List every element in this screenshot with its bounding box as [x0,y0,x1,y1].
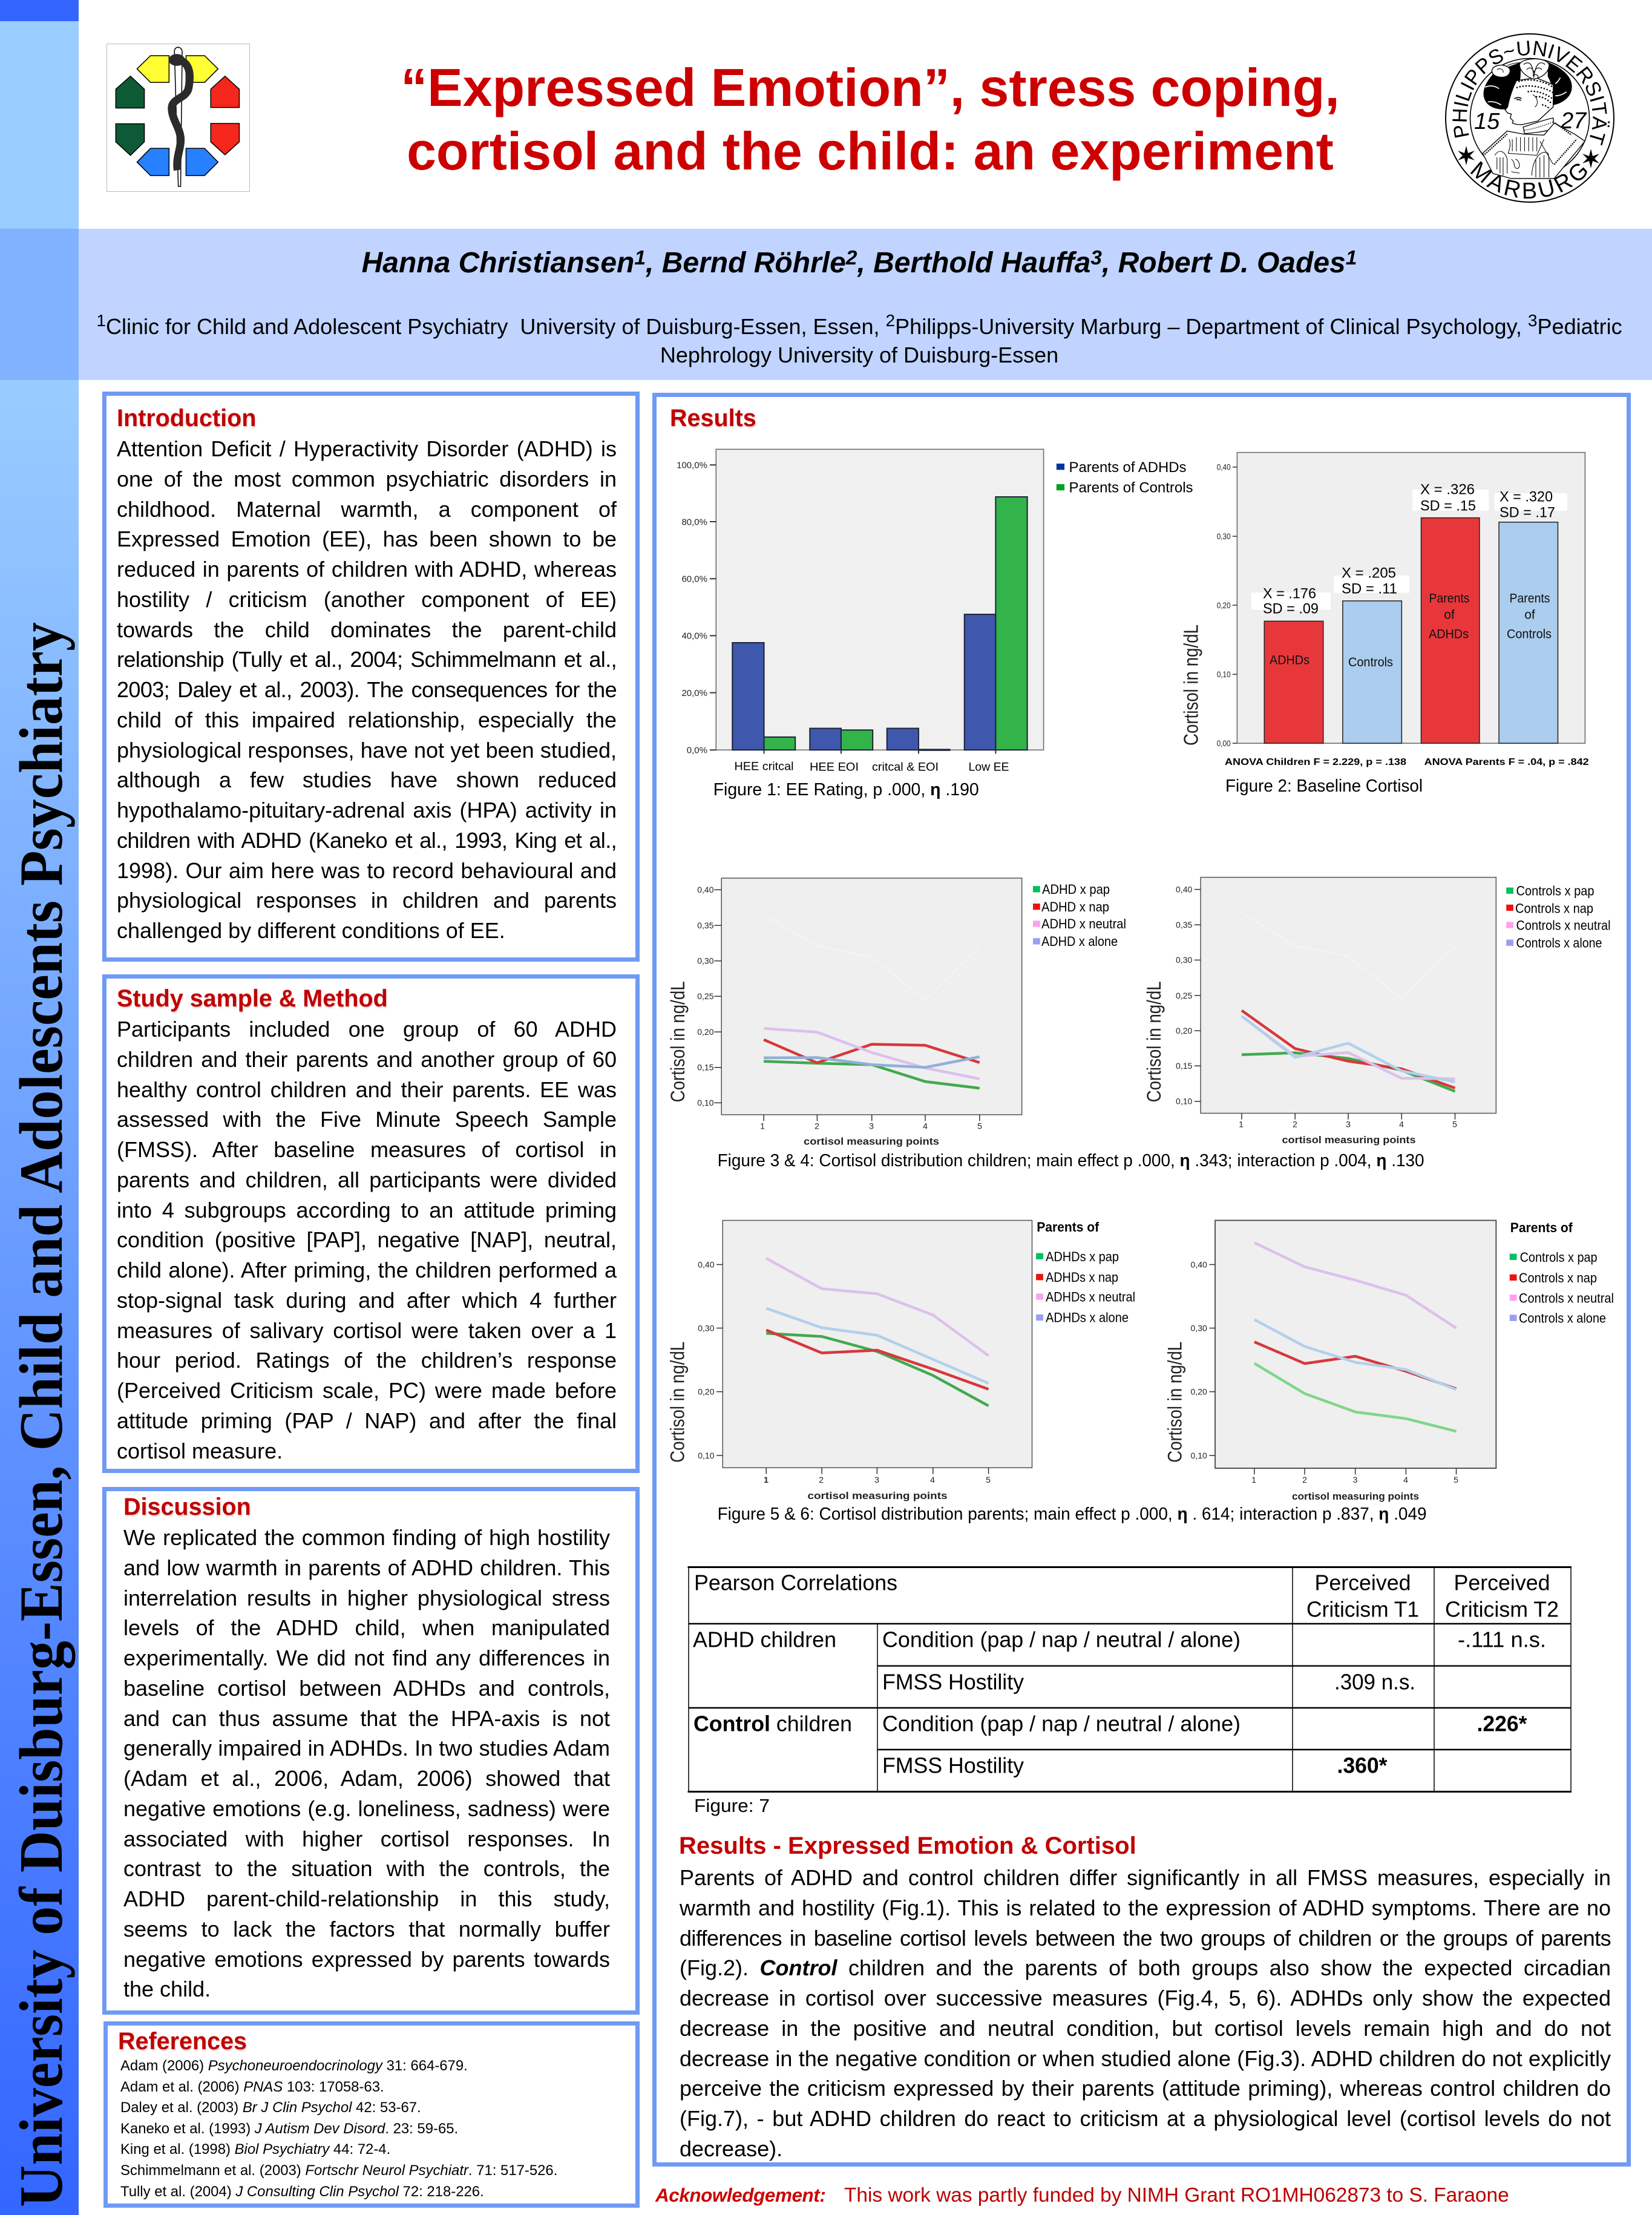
panel: discussion [102,1487,640,2015]
chart: figure 3 cortisol children ADHD line chart: cortisol measuring points [804,1136,939,1147]
text: introduction body: relationship (Tully et al., 2004; Schimmelmann et al., [117,647,617,672]
text: method body: children and their parents and another group of 60 [117,1047,617,1072]
chart: figure 1 EE rating bar chart: 40,0% [681,631,707,642]
authors band background with authors and affiliations [79,229,1652,380]
text: method body: attitude priming (PAP / NAP) and after the final [117,1408,617,1433]
logo: Philipps-Universität Marburg seal: 27 [1560,108,1587,134]
text: results summary: decrease). [680,2136,782,2161]
chart: figure 4 cortisol children controls line chart: 0,20 [1176,1026,1193,1035]
text: discussion body: ADHD parent-child-relationship in this study, [123,1886,610,1911]
chart: figure 2 baseline cortisol bar chart: Parents [1429,591,1469,605]
chart: figure 6 cortisol parents of controls line chart: 0,20 [1191,1387,1207,1397]
chart: figure 6 cortisol parents of controls line chart: 0,30 [1191,1323,1207,1333]
chart: figure 4 cortisol children controls line chart: Controls x nap [1515,901,1593,916]
text: introduction body: hypothalamo-pituitary-adrenal axis (HPA) activity in [117,798,617,822]
chart: figure 1 EE rating bar chart: HEE critcal [735,761,794,773]
chart: figure 5 cortisol parents of ADHDs line chart: 1 [764,1475,769,1485]
chart: figure 4 cortisol children controls line chart: 2 [1293,1119,1297,1129]
text: introduction body [117,434,617,946]
heading: introduction: Introduction [117,405,256,432]
chart: figure 2 baseline cortisol bar chart: Controls [1348,655,1393,669]
heading: discussion: Discussion [123,1494,251,1520]
text: introduction body: one of the most common psychiatric disorders in [117,467,617,491]
left strip: light block beside title [0,21,79,229]
chart: figure 4 cortisol children controls line chart: cortisol measuring points [1282,1134,1416,1146]
chart: figure 5 cortisol parents of ADHDs line chart [660,1210,1144,1503]
chart: figure 6 cortisol parents of controls line chart [1144,1210,1622,1503]
chart: figure 2 baseline cortisol bar chart: of [1444,608,1455,622]
chart: figure 2 baseline cortisol bar chart: Cortisol in ng/dL [1180,625,1202,746]
left strip with vertical institution title: University of Duisburg-Essen, Child and Adolescents Psychiatry [7,622,76,2207]
chart: figure 2 baseline cortisol bar chart: ADHDs [1429,627,1469,641]
table: Pearson correlations, figure 7: Criticism T2 [1445,1597,1559,1622]
text: results summary: decrease in the negative condition or when studied alone (Fig.3). ADHD children do not explicitly [680,2046,1611,2071]
chart: figure 1 EE rating bar chart: Parents of Controls [1069,480,1193,496]
text: discussion body: levels of the ADHD child, when manipulated [123,1615,610,1640]
chart: figure 3 cortisol children ADHD line chart: 0,15 [697,1063,714,1072]
chart: figure 5 cortisol parents of ADHDs line chart: 2 [819,1475,824,1485]
chart: figure 5 cortisol parents of ADHDs line chart: cortisol measuring points [807,1490,948,1501]
chart: figure 6 cortisol parents of controls line chart: 4 [1403,1475,1408,1485]
chart: figure 6 cortisol parents of controls line chart: cortisol measuring points [1292,1491,1419,1502]
chart: figure 1 EE rating bar chart: 80,0% [681,517,707,527]
chart: figure 5 cortisol parents of ADHDs line chart: 3 [874,1475,879,1485]
text: method body: assessed with the Five Minute Speech Sample [117,1107,617,1132]
text: reference list: Adam et al. (2006) PNAS 103: 17058-63. [120,2079,384,2095]
heading: study sample and method: Study sample & Method [117,985,388,1012]
caption: figures 3 and 4: Figure 3 & 4: Cortisol distribution children; main effect p .000, η .343; interaction p .004, η .130 [718,1151,1424,1170]
heading: results expressed emotion and cortisol: Results - Expressed Emotion & Cortisol [679,1833,1136,1859]
panel: study sample and method [102,974,640,1473]
text: method body: Participants included one group of 60 ADHD [117,1017,617,1042]
text: method body: (Perceived Criticism scale, PC) were made before [117,1378,617,1403]
chart: figure 5 cortisol parents of ADHDs line chart: 0,40 [698,1259,715,1269]
chart: figure 3 cortisol children ADHD line chart: 1 [760,1121,765,1131]
chart: figure 3 cortisol children ADHD line chart: 3 [869,1121,874,1131]
chart: figure 2 baseline cortisol bar chart: SD = .11 [1342,580,1397,597]
text: This work was partly funded by NIMH Grant RO1MH062873 to S. Faraone [844,2184,1509,2207]
chart: figure 2 baseline cortisol bar chart: 0,10 [1217,669,1231,679]
chart: figure 5 cortisol parents of ADHDs line chart: 0,20 [698,1387,715,1397]
chart: figure 2 baseline cortisol bar chart: 0,30 [1217,531,1231,541]
chart: figure 3 cortisol children ADHD line chart: 2 [815,1121,819,1131]
chart: figure 5 cortisol parents of ADHDs line chart: ADHDs x nap [1046,1270,1118,1285]
chart: figure 4 cortisol children controls line chart: 0,25 [1176,991,1193,1000]
affiliations [79,312,1640,369]
chart: figure 5 cortisol parents of ADHDs line chart: 0,30 [698,1323,715,1333]
chart: figure 1 EE rating bar chart: critcal & EOI [872,761,939,774]
text: discussion body: (Adam et al., 2006, Adam, 2006) showed that [123,1766,610,1791]
chart: figure 2 baseline cortisol bar chart: Controls [1507,627,1552,641]
text: reference list: Tully et al. (2004) J Consulting Clin Psychol 72: 218-226. [120,2184,484,2200]
text: introduction body: although a few studies have shown reduced [117,767,617,792]
chart: figure 5 cortisol parents of ADHDs line chart: Parents of [1037,1219,1100,1235]
chart: figure 5 cortisol parents of ADHDs line chart: 4 [930,1475,935,1485]
title [401,58,1340,181]
text: results summary: (Fig.2). Control children and the parents of both groups also show the expected circadian [680,1955,1611,1980]
text: discussion body: associated with higher cortisol responses. In [123,1826,610,1851]
text: method body: hour period. Ratings of the children’s response [117,1348,617,1373]
chart: figure 4 cortisol children controls line chart [1144,871,1622,1149]
chart: figure 1 EE rating bar chart: Low EE [968,761,1009,774]
table: Pearson correlations, figure 7: FMSS Hostility [882,1753,1024,1778]
table: Pearson correlations, figure 7: Condition (pap / nap / neutral / alone) [882,1711,1241,1736]
logo: Philipps-Universität Marburg seal: 15 [1474,109,1500,134]
chart: figure 1 EE rating bar chart: Parents of ADHDs [1069,459,1186,476]
left strip: block beside authors [0,229,79,380]
text: discussion body: experimentally. We did not find any differences in [123,1646,610,1670]
text: reference list [120,2056,557,2202]
panel: introduction [102,392,640,962]
chart: figure 3 cortisol children ADHD line chart: 4 [923,1121,928,1131]
chart: figure 4 cortisol children controls line chart: Controls x pap [1516,883,1594,898]
chart: figure 4 cortisol children controls line chart: 1 [1239,1119,1244,1129]
text: introduction body: children with ADHD (Kaneko et al., 1993, King et al., [117,828,617,853]
panel: references [103,2021,640,2208]
text: reference list: Adam (2006) Psychoneuroendocrinology 31: 664-679. [120,2058,468,2074]
chart: figure 3 cortisol children ADHD line chart: Cortisol in ng/dL [667,981,689,1102]
table: Pearson correlations, figure 7 [684,1564,1575,1819]
panel: results [652,393,1631,2167]
chart: figure 2 baseline cortisol bar chart: X = .205 [1342,565,1396,581]
text: discussion body: negative emotions expressed by parents towards [123,1946,610,1972]
chart: figure 3 cortisol children ADHD line chart: 0,35 [697,920,714,930]
chart: figure 5 cortisol parents of ADHDs line chart: ADHDs x alone [1046,1310,1129,1325]
text: reference list: Kaneko et al. (1993) J Autism Dev Disord. 23: 59-65. [120,2121,458,2137]
chart: figure 3 cortisol children ADHD line chart: ADHD x nap [1041,899,1109,914]
chart: figure 3 cortisol children ADHD line chart: 0,40 [697,885,714,894]
acknowledgement: Acknowledgement: [655,2185,825,2206]
table: Pearson correlations, figure 7: Perceived [1314,1570,1411,1595]
chart: figure 5 cortisol parents of ADHDs line chart: ADHDs x pap [1046,1249,1119,1264]
chart: figure 3 cortisol children ADHD line chart: 5 [977,1121,982,1131]
chart: figure 4 cortisol children controls line chart: Controls x neutral [1516,917,1611,933]
text: introduction body: towards the child dominates the parent-child [117,617,617,642]
table: Pearson correlations, figure 7: ADHD children [693,1627,836,1652]
table: Pearson correlations, figure 7: -.111 n.s. [1458,1627,1546,1652]
chart: figure 4 cortisol children controls line chart: 0,30 [1176,955,1193,965]
text: discussion body: baseline cortisol between ADHDs and controls, [123,1676,610,1701]
text: discussion body: contrast to the situation with the controls, the [123,1856,610,1881]
title: “Expressed Emotion”, stress coping, [401,58,1340,117]
chart: figure 2 baseline cortisol bar chart: X = .326 [1420,481,1475,497]
text: introduction body: Expressed Emotion (EE), has been shown to be [117,527,617,551]
title: cortisol and the child: an experiment [407,122,1334,181]
chart: figure 2 baseline cortisol bar chart: X = .320 [1500,488,1553,505]
chart: figure 2 baseline cortisol bar chart: ANOVA Children F = 2.229, p = .138 [1225,757,1406,767]
text: introduction body: physiological responses, have not yet been studied, [117,737,617,763]
chart: figure 2 baseline cortisol bar chart: of [1524,608,1535,622]
text: discussion body [123,1523,610,2004]
chart: figure 6 cortisol parents of controls line chart: Cortisol in ng/dL [1164,1342,1185,1463]
chart: figure 2 baseline cortisol bar chart: 0,00 [1217,738,1231,748]
chart: figure 6 cortisol parents of controls line chart: Controls x nap [1519,1270,1597,1285]
text: method body: condition (positive [PAP], negative [NAP], neutral, [117,1227,617,1252]
chart: figure 3 cortisol children ADHD line chart: 0,20 [697,1027,714,1037]
chart: figure 3 cortisol children ADHD line chart: ADHD x pap [1042,882,1110,897]
chart: figure 5 cortisol parents of ADHDs line chart: 0,10 [698,1451,715,1460]
text: reference list: Daley et al. (2003) Br J Clin Psychol 42: 53-67. [120,2099,421,2116]
table: Pearson correlations, figure 7: Condition (pap / nap / neutral / alone) [882,1627,1241,1652]
text: introduction body: challenged by different conditions of EE. [117,918,505,943]
text: introduction body: childhood. Maternal warmth, a component of [117,496,617,522]
table: Pearson correlations, figure 7: FMSS Hostility [882,1670,1024,1695]
chart: figure 3 cortisol children ADHD line chart: ADHD x alone [1041,934,1118,949]
chart: figure 2 baseline cortisol bar chart [1180,442,1628,799]
chart: figure 6 cortisol parents of controls line chart: Controls x neutral [1519,1291,1614,1306]
chart: figure 5 cortisol parents of ADHDs line chart: 5 [986,1475,991,1485]
text: method body: measures of salivary cortisol were taken over a 1 [117,1318,617,1342]
chart: figure 1 EE rating bar chart: 0,0% [687,746,707,756]
chart: figure 1 EE rating bar chart: 20,0% [681,688,707,698]
chart: figure 2 baseline cortisol bar chart: ANOVA Parents F = .04, p = .842 [1424,757,1589,767]
chart: figure 5 cortisol parents of ADHDs line chart: ADHDs x neutral [1046,1289,1135,1304]
text: introduction body: reduced in parents of children with ADHD, whereas [117,557,617,582]
left strip: top dark block [0,0,79,21]
chart: figure 3 cortisol children ADHD line chart [660,871,1144,1149]
text: results summary: decrease in the positive and neutral condition, but cortisol levels remain high and do not [680,2016,1611,2041]
chart: figure 2 baseline cortisol bar chart: X = .176 [1263,585,1316,602]
text: discussion body: seems to lack the factors that normally buffer [123,1917,610,1941]
table: Pearson correlations, figure 7: Criticism T1 [1306,1597,1419,1622]
text: results summary: decrease in cortisol over successive measures (Fig.4, 5, 6). ADHDs only show the expected [680,1986,1611,2010]
chart: figure 6 cortisol parents of controls line chart: 1 [1251,1475,1256,1485]
affiliations: 1Clinic for Child and Adolescent Psychiatry University of Duisburg-Essen, Essen, 2Philipps-University Marburg – Department of Clinical Psychology, 3Pediatric [96,311,1622,339]
chart: figure 1 EE rating bar chart: 100,0% [677,461,707,471]
chart: figure 1 EE rating bar chart: 60,0% [681,574,707,584]
text: introduction body: physiological responses in children and parents [117,888,617,913]
text: introduction body: 1998). Our aim here was to record behavioural and [117,858,617,882]
text: discussion body: negative emotions (e.g. loneliness, sadness) were [123,1796,610,1821]
chart: figure 4 cortisol children controls line chart: Controls x alone [1516,936,1602,950]
text: introduction body: 2003; Daley et al., 2003). The consequences for the [117,677,617,702]
text: reference list: King et al. (1998) Biol Psychiatry 44: 72-4. [120,2141,390,2158]
table: Pearson correlations, figure 7: Perceived [1454,1570,1550,1595]
logo: clinic emblem with rod and snake [107,44,250,192]
text: discussion body: interrelation results in higher physiological stress [123,1586,610,1610]
chart: figure 6 cortisol parents of controls line chart: Parents of [1510,1220,1573,1235]
chart: figure 1 EE rating bar chart: HEE EOI [810,761,859,774]
chart: figure 6 cortisol parents of controls line chart: 0,10 [1191,1451,1207,1460]
chart: figure 2 baseline cortisol bar chart: Figure 2: Baseline Cortisol [1225,776,1423,796]
chart: figure 3 cortisol children ADHD line chart: 0,10 [697,1098,714,1108]
chart: figure 5 cortisol parents of ADHDs line chart: Cortisol in ng/dL [667,1342,689,1463]
caption: figures 5 and 6: Figure 5 & 6: Cortisol distribution parents; main effect p .000, η . 614; interaction p .837, η .049 [718,1505,1427,1524]
text: introduction body: hostility / criticism (another component of EE) [117,587,617,612]
text: method body: healthy control children and their parents. EE was [117,1077,617,1101]
text: method body: parents and children, all participants were divided [117,1167,617,1192]
chart: figure 6 cortisol parents of controls line chart: Controls x pap [1520,1250,1598,1265]
text: method body [117,1014,617,1466]
chart: figure 4 cortisol children controls line chart: 0,15 [1176,1061,1193,1071]
chart: figure 6 cortisol parents of controls line chart: Controls x alone [1519,1311,1606,1326]
text: method body: child alone). After priming, the children performed a [117,1258,617,1282]
text: results summary: differences in baseline cortisol levels between the two groups of children or the groups of parents [680,1926,1611,1950]
text: introduction body: child of this impaired relationship, especially the [117,707,617,732]
chart: figure 6 cortisol parents of controls line chart: 2 [1302,1475,1307,1485]
chart: figure 2 baseline cortisol bar chart: Parents [1509,591,1550,605]
chart: figure 4 cortisol children controls line chart: 0,40 [1176,885,1193,894]
text: introduction body: Attention Deficit / Hyperactivity Disorder (ADHD) is [117,436,617,461]
chart: figure 4 cortisol children controls line chart: 0,35 [1176,920,1193,930]
chart: figure 3 cortisol children ADHD line chart: 0,25 [697,991,714,1001]
chart: figure 6 cortisol parents of controls line chart: 3 [1353,1475,1358,1485]
text: discussion body: the child. [123,1977,211,2001]
chart: figure 3 cortisol children ADHD line chart: 0,30 [697,956,714,966]
text: results summary: (Fig.7), - but ADHD children do react to criticism at a physiological level (cortisol levels do not [680,2106,1611,2131]
chart: figure 1 EE rating bar chart: Figure 1: EE Rating, p .000, η .190 [713,780,979,799]
chart: figure 2 baseline cortisol bar chart: ADHDs [1270,653,1309,667]
text: results summary [680,1863,1611,2164]
text: method body: cortisol measure. [117,1438,283,1463]
text: reference list: Schimmelmann et al. (2003) Fortschr Neurol Psychiatr. 71: 517-526. [120,2162,557,2179]
heading: results: Results [670,405,756,432]
chart: figure 3 cortisol children ADHD line chart: ADHD x neutral [1041,916,1126,931]
chart: figure 2 baseline cortisol bar chart: SD = .15 [1420,497,1476,514]
chart: figure 6 cortisol parents of controls line chart: 0,40 [1191,1259,1207,1269]
table: Pearson correlations, figure 7: .226* [1477,1711,1527,1736]
text: discussion body: and low warmth in parents of ADHD children. This [123,1555,610,1580]
text: results summary: Parents of ADHD and control children differ significantly in all FMSS measures, especially in [680,1865,1611,1890]
chart: figure 6 cortisol parents of controls line chart: 5 [1454,1475,1458,1485]
chart: figure 2 baseline cortisol bar chart: 0,20 [1217,600,1231,610]
text: discussion body: We replicated the common finding of high hostility [123,1525,610,1550]
text: results summary: warmth and hostility (Fig.1). This is related to the expression of ADHD symptoms. There are no [680,1895,1611,1920]
affiliations: Nephrology University of Duisburg-Essen [660,343,1058,367]
chart: figure 4 cortisol children controls line chart: Cortisol in ng/dL [1143,981,1165,1102]
logo: Philipps-Universität Marburg seal [1445,33,1614,203]
text: method body: (FMSS). After baseline measures of cortisol in [117,1137,617,1162]
chart: figure 2 baseline cortisol bar chart: 0,40 [1217,462,1231,472]
table: Pearson correlations, figure 7: .309 n.s. [1334,1670,1415,1695]
chart: figure 1 EE rating bar chart [666,436,1195,805]
chart: figure 2 baseline cortisol bar chart: SD = .09 [1263,600,1319,617]
text: discussion body: generally impaired in ADHDs. In two studies Adam [123,1736,610,1761]
logo: Philipps-Universität Marburg seal: PHILIPPS~UNIVERSITÄT [1452,41,1610,145]
heading: references: References [118,2028,247,2055]
chart: figure 2 baseline cortisol bar chart: SD = .17 [1500,504,1555,520]
table: Pearson correlations, figure 7: Control children [693,1711,852,1736]
text: results summary: perceive the criticism expressed by their parents (attitude priming), whereas control children do [680,2076,1611,2101]
text: method body: stop-signal task during and after which 4 further [117,1288,617,1313]
chart: figure 4 cortisol children controls line chart: 3 [1346,1119,1351,1129]
authors: Hanna Christiansen1, Bernd Röhrle2, Berthold Hauffa3, Robert D. Oades1 [362,247,1357,279]
table: Pearson correlations, figure 7: Figure: 7 [694,1795,770,1816]
table: Pearson correlations, figure 7: .360* [1337,1753,1387,1778]
logo: Philipps-Universität Marburg seal: MARBURG [1470,161,1587,199]
table: Pearson correlations, figure 7: Pearson Correlations [694,1570,897,1595]
chart: figure 4 cortisol children controls line chart: 0,10 [1176,1097,1193,1106]
chart: figure 4 cortisol children controls line chart: 5 [1452,1119,1457,1129]
text: discussion body: and can thus assume that the HPA-axis is not [123,1705,610,1731]
text: method body: into 4 subgroups according to an attitude priming [117,1197,617,1222]
chart: figure 4 cortisol children controls line chart: 4 [1399,1119,1404,1129]
